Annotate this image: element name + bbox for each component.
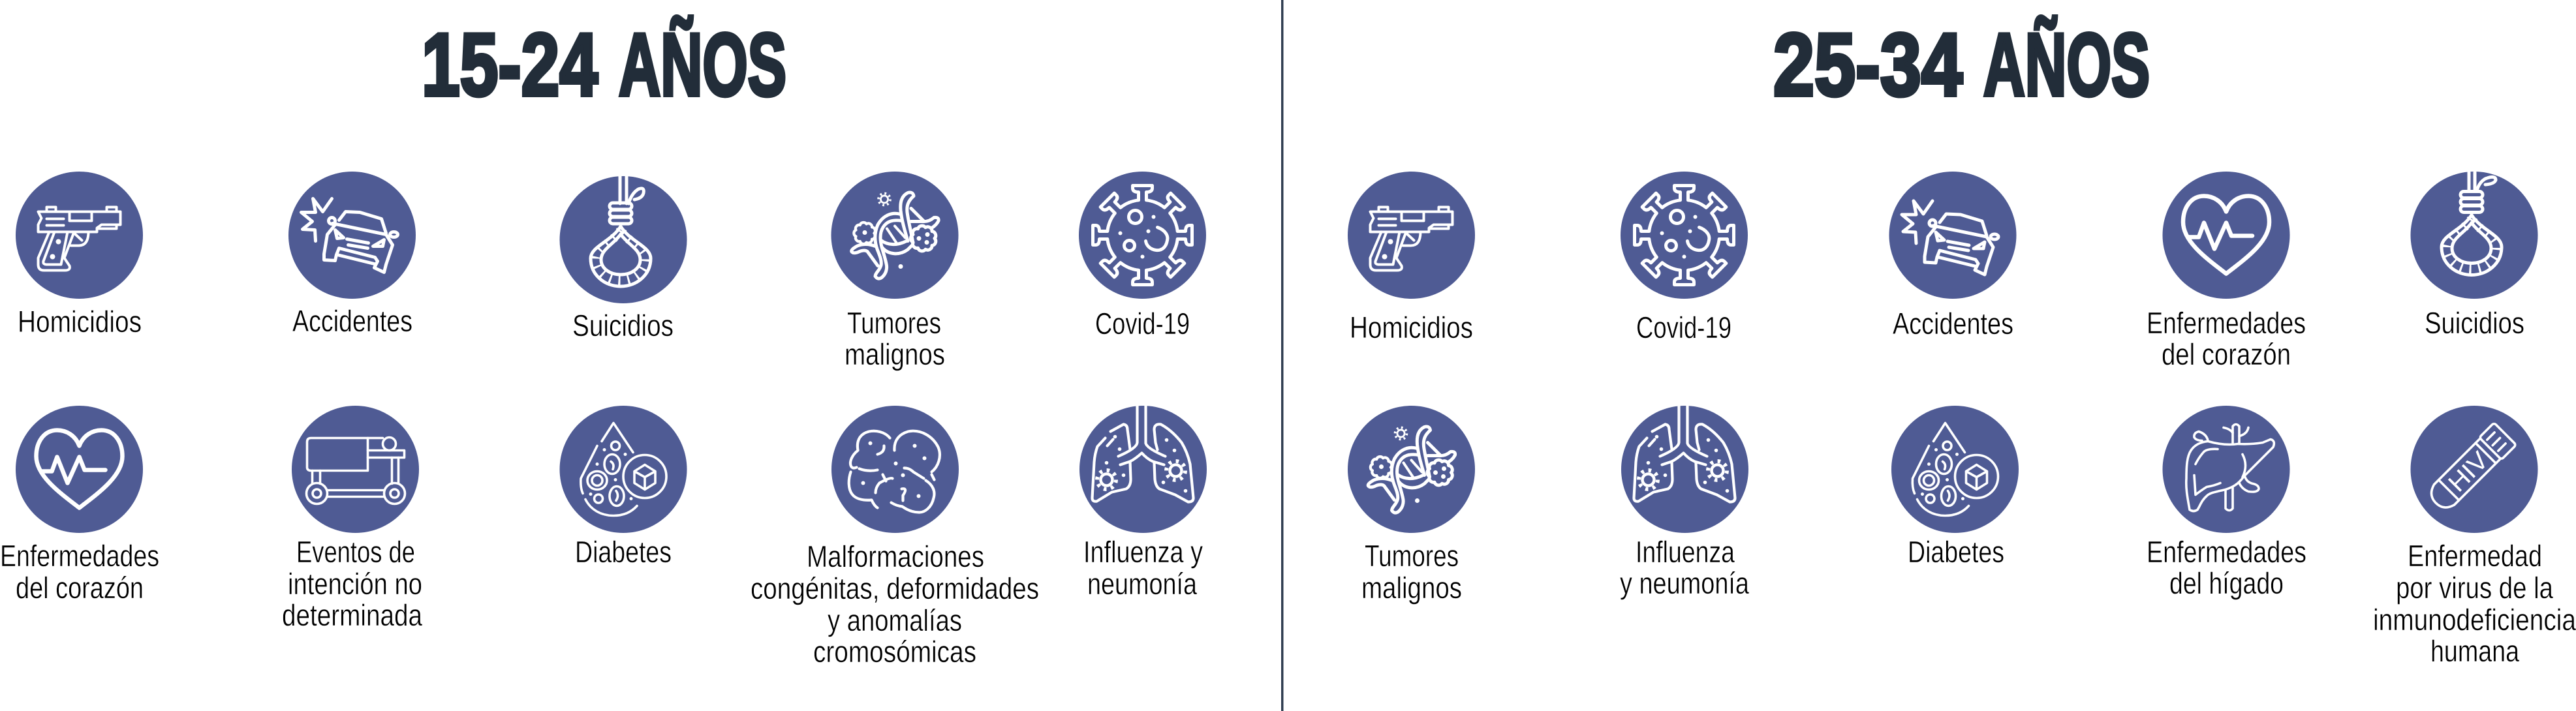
label: Malformaciones congénitas, deformidades y anomalías cromosómicas: Malformaciones — [807, 539, 984, 573]
icon: liver — [2163, 406, 2289, 533]
label: Tumores malignos: Tumores — [1365, 539, 1459, 573]
label: Enfermedades del corazón: Enfermedades — [0, 539, 159, 573]
icon: blood drop with sugar cube — [560, 406, 687, 533]
icon: dna and tumor cells — [831, 172, 958, 299]
icon: HIV test tube: HIV — [2444, 446, 2494, 498]
item: Diabetes — [1891, 406, 2019, 569]
label: Enfermedad por virus de la inmunodeficiencia humana — [2373, 539, 2576, 668]
icon: pistol — [16, 172, 143, 299]
label: Enfermedades del corazón: del corazón — [16, 571, 144, 605]
label: Enfermedades del corazón: Enfermedades — [2147, 306, 2306, 340]
item: Suicidios — [2411, 172, 2537, 340]
label: Malformaciones congénitas, deformidades y anomalías cromosómicas: y anomalías — [828, 603, 962, 637]
label: Enfermedades del hígado: Enfermedades — [2147, 535, 2306, 569]
label: Influenza y neumonía — [1083, 535, 1203, 601]
item: Accidentes — [288, 172, 416, 338]
icon: heart with pulse — [2163, 172, 2289, 299]
label: Influenza y neumonía: y neumonía — [1620, 566, 1749, 600]
icon: heart with pulse — [16, 406, 143, 533]
label: Suicidios: Suicidios — [2425, 306, 2524, 340]
item: Eventos de intención no determinada — [282, 406, 422, 632]
label: Enfermedad por virus de la inmunodeficiencia humana: humana — [2430, 634, 2519, 668]
label: Malformaciones congénitas, deformidades y anomalías cromosómicas — [751, 539, 1039, 669]
label: Eventos de intención no determinada: determinada — [282, 598, 422, 632]
label: Covid-19: Covid-19 — [1095, 307, 1190, 340]
item: Malformaciones — [751, 406, 1039, 669]
icon: pistol — [1348, 172, 1475, 299]
label: Enfermedades del corazón — [0, 539, 159, 605]
title: 25-34 años — [1773, 15, 2150, 114]
icon: HIV test tube — [2411, 406, 2537, 533]
label: Enfermedades del hígado — [2147, 535, 2306, 600]
title: 15-24 años: 15-24 — [422, 15, 598, 114]
icon: dna and tumor cells — [1348, 406, 1475, 533]
icon: virus — [1079, 172, 1206, 299]
item: Tumores malignos — [1348, 406, 1475, 605]
item: Tumores malignos — [831, 172, 958, 371]
label: Diabetes: Diabetes — [1908, 535, 2004, 569]
label: Enfermedades del corazón — [2147, 306, 2306, 371]
label: Homicidios: Homicidios — [18, 305, 142, 339]
item: Diabetes — [560, 406, 687, 569]
label: Influenza y neumonía: Influenza — [1636, 535, 1735, 569]
icon: crashed car — [288, 172, 416, 299]
icon: crashed car — [1889, 172, 2017, 299]
label: Homicidios: Homicidios — [1350, 310, 1473, 344]
label: Accidentes: Accidentes — [1893, 307, 2013, 340]
item: Enfermedad por VIH — [2373, 406, 2576, 668]
title: 25-34 años: AÑOS — [1983, 15, 2150, 114]
item: Covid-19 — [1621, 172, 1748, 344]
panel: causes 15-24 — [0, 172, 1207, 669]
icon: lungs with virus — [1621, 406, 1748, 533]
item: Accidentes — [1889, 172, 2017, 340]
item: Homicidios — [1348, 172, 1475, 344]
item: Enfermedades del hígado — [2147, 406, 2306, 600]
icon: virus — [1621, 172, 1748, 299]
label: Enfermedad por virus de la inmunodeficiencia humana: Enfermedad — [2408, 539, 2542, 573]
label: Malformaciones congénitas, deformidades y anomalías cromosómicas: congénitas, deformidades — [751, 571, 1039, 605]
icon: noose — [2411, 172, 2537, 299]
icon: lungs with virus — [1079, 406, 1207, 533]
label: Tumores malignos — [845, 306, 945, 371]
title: 15-24 años: AÑOS — [619, 15, 786, 114]
label: Eventos de intención no determinada: intención no — [288, 567, 422, 601]
icon: malformed cells — [831, 406, 959, 533]
label: Tumores malignos: Tumores — [847, 306, 941, 340]
label: Malformaciones congénitas, deformidades y anomalías cromosómicas: cromosómicas — [813, 635, 976, 669]
item: Suicidios — [560, 176, 687, 342]
icon: noose — [560, 176, 687, 303]
title: 25-34 años: 25-34 — [1773, 15, 1963, 114]
item: Covid-19 — [1079, 172, 1206, 340]
icon: blood drop with sugar cube — [1891, 406, 2019, 533]
label: Eventos de intención no determinada: Eventos de — [296, 535, 415, 569]
label: Diabetes: Diabetes — [575, 535, 672, 569]
icon: hospital stretcher — [292, 406, 419, 533]
label: Influenza y neumonía: Influenza y — [1083, 535, 1203, 569]
item: Enfermedades del corazón — [0, 406, 159, 605]
divider line — [1281, 0, 1283, 711]
item: Influenza y neumonía — [1079, 406, 1207, 601]
label: Covid-19: Covid-19 — [1636, 310, 1731, 344]
label: Tumores malignos: malignos — [1361, 571, 1462, 605]
label: Eventos de intención no determinada — [282, 535, 422, 632]
label: Enfermedades del corazón: del corazón — [2162, 337, 2291, 371]
label: Accidentes: Accidentes — [292, 304, 412, 338]
panel: causes 25-34 — [1348, 172, 2576, 668]
label: Suicidios: Suicidios — [572, 309, 674, 342]
label: Tumores malignos — [1361, 539, 1462, 605]
item: Enfermedades del corazón — [2147, 172, 2306, 371]
label: Influenza y neumonía — [1620, 535, 1749, 600]
item: Homicidios — [16, 172, 143, 339]
item: Influenza y neumonía — [1620, 406, 1749, 600]
label: Influenza y neumonía: neumonía — [1087, 567, 1197, 601]
title: 15-24 años — [422, 15, 786, 114]
label: Enfermedades del hígado: del hígado — [2169, 566, 2284, 600]
label: Tumores malignos: malignos — [845, 337, 945, 371]
